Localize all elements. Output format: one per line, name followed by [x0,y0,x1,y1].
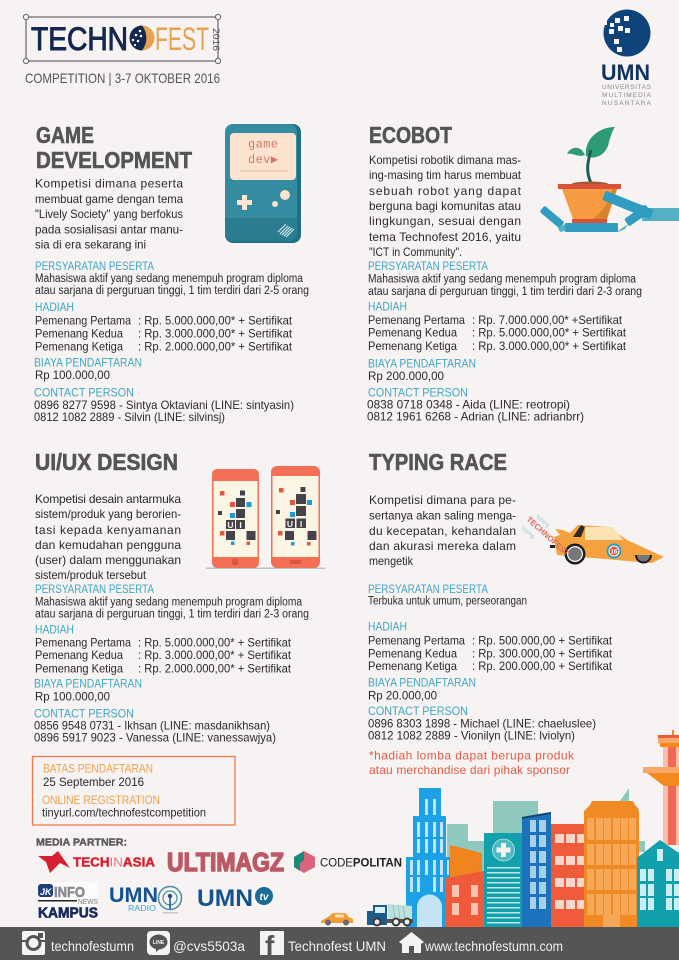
registration fee [34,678,142,704]
logo: UMN TV: UMN [197,885,253,912]
prizes: : Rp. 500.000,00 + Sertifikat [472,633,613,647]
background buildings [447,801,645,927]
orange slanted building [450,845,482,880]
icon: two smartphones: I [300,519,302,529]
description: "ICT in Community". [369,245,462,259]
description: tasi kepada kenyamanan [35,523,181,537]
contact person [368,705,596,742]
logo: UMN Radio [109,884,182,914]
prize footnote [369,748,575,777]
prizes: Pemenang Kedua [368,646,457,660]
description: dan kemudahan pengguna [35,538,181,552]
icon: two smartphones: U [287,519,293,529]
orange tall building [584,801,639,927]
prizes: : Rp. 2.000.000,00* + Sertifikat [138,340,293,354]
logo: UMN Radio: UMN [109,884,158,907]
contact person: CONTACT PERSON [34,707,134,720]
logo: Codepolitan [294,851,402,873]
logo: Technofest 2016: TECHN [31,21,128,57]
prizes: Pemenang Ketiga [35,661,123,675]
panel: ecobot [367,122,679,424]
website address: www.technofestumn.com [424,938,563,954]
description: "Lively Society" yang berfokus [35,207,183,221]
description [369,153,522,259]
contact person: 0856 9548 0731 - Ikhsan (LINE: masdanikhsan) [34,718,270,732]
logo: UMN: NUSANTARA [602,100,652,107]
facebook page: Technofest UMN [288,938,386,954]
callout: registration deadline: ONLINE REGISTRATION [42,794,160,807]
icon: website house [399,932,424,953]
prizes: Pemenang Ketiga [368,659,457,673]
callout: registration deadline: BATAS PENDAFTARAN [43,763,153,776]
prizes: : Rp. 5.000.000,00* + Sertifikat [138,636,292,650]
prizes: : Rp. 200.000,00 + Sertifikat [472,659,613,673]
description: Kompetisi desain antarmuka [35,492,181,506]
requirements [35,260,309,297]
icon: race car with letters: typing [520,525,536,540]
truck [367,904,413,926]
callout: registration deadline [32,756,235,825]
prizes: : Rp. 7.000.000,00* +Sertifikat [472,313,623,327]
logo: Info Kampus [38,882,98,922]
panel: media partners [36,836,402,922]
icon: race car with letters: typing [535,514,551,529]
icon: two smartphones: U [227,520,234,530]
requirements: atau sarjana di perguruan tinggi, 1 tim terdiri dari 2-5 orang [35,285,309,297]
prizes: Pemenang Pertama [368,313,465,327]
logo: UMN: UNIVERSITAS [602,84,652,91]
prizes: : Rp. 5.000.000,00* + Sertifikat [138,313,293,327]
contact person: 0896 5917 9023 - Vanessa (LINE: vanessawjya) [34,731,276,745]
icon: two smartphones [206,466,325,569]
contact person: 0896 8303 1898 - Michael (LINE: chaeluslee) [368,716,596,730]
logo: Info Kampus: INFO [54,884,85,901]
description: sertanya akan saling menga- [369,509,516,523]
prizes [368,301,627,353]
description: Kompetisi dimana para pe- [369,493,516,507]
icon: race car with letters [520,514,664,564]
requirements [35,583,309,620]
logo: Ultimagz: ULTIMAGZ [167,847,284,877]
prizes: : Rp. 300.000,00 + Sertifikat [472,646,613,660]
contact person: 0812 1082 2889 - Silvin (LINE: silvinsj) [34,410,225,424]
heading: ecobot: ECOBOT [369,122,452,148]
requirements [368,583,527,607]
logo: UMN: UMN [601,60,650,85]
requirements: atau sarjana di perguruan tinggi, 1 tim terdiri dari 2-3 orang [35,608,309,620]
logo: UMN TV: tv [260,892,270,903]
icon: game console [225,124,301,243]
tv tower [643,730,679,845]
instagram handle: technofestumn [51,938,134,954]
requirements: PERSYARATAN PESERTA [35,583,154,596]
panel: ui/ux design [34,449,325,745]
requirements: atau sarjana di perguruan tinggi, 1 tim terdiri dari 2-3 orang [368,286,642,298]
contact person [34,707,276,745]
description [369,493,516,568]
description: Kompetisi dimana peserta [35,176,183,190]
requirements: Mahasiswa aktif yang sedang menempuh program diploma [368,273,637,285]
logo: Tech in Asia [38,851,156,873]
requirements [368,260,642,298]
contact person [34,387,294,424]
icon: line: LINE [153,940,165,946]
small car [321,913,353,926]
logo: Codepolitan: CODEPOLITAN [320,856,402,870]
heading: game development [36,122,192,173]
registration fee [368,677,476,702]
prizes: Pemenang Kedua [368,326,457,340]
description: tema Technofest 2016, yaitu [369,230,521,244]
media partner heading: MEDIA PARTNER: [36,836,127,848]
line handle: @cvs5503a [173,938,245,954]
icon: race car with letters: 16 [611,550,618,556]
requirements: Mahasiswa aktif yang sedang menempuh program diploma [35,273,304,285]
contact person: CONTACT PERSON [34,387,134,400]
registration fee: BIAYA PENDAFTARAN [34,357,142,370]
contact person: CONTACT PERSON [368,705,468,718]
prizes [35,301,293,354]
triangle roof [620,788,629,801]
prizes: : Rp. 5.000.000,00* + Sertifikat [472,326,627,340]
requirements: PERSYARATAN PESERTA [368,583,488,596]
icon: race car with letters: TECHNOFEST [525,515,571,558]
description: ing-masing tim harus membuat [369,168,522,182]
callout: registration deadline: tinyurl.com/technofestcompetition [42,806,206,820]
logo: Info Kampus: KAMPUS [38,904,98,922]
logo: UMN [601,10,652,107]
prizes: HADIAH [368,621,407,634]
prizes: Pemenang Kedua [35,327,123,341]
prizes: : Rp. 3.000.000,00* + Sertifikat [138,327,293,341]
logo: Technofest 2016 [23,14,221,64]
description: pada sosialisasi antar manu- [35,222,183,236]
prizes: : Rp. 3.000.000,00* + Sertifikat [472,339,627,353]
registration fee: BIAYA PENDAFTARAN [368,677,476,690]
logo: Technofest 2016: FEST [155,21,209,57]
icon: plant held by robot arm [539,127,679,232]
prizes: : Rp. 2.000.000,00* + Sertifikat [138,661,292,675]
prize footnote: *hadiah lomba dapat berupa produk [369,748,575,762]
registration fee: BIAYA PENDAFTARAN [34,678,142,691]
footer bar [0,927,679,960]
teal house [637,840,679,927]
prizes: Pemenang Ketiga [35,340,123,354]
requirements: Terbuka untuk umum, perseorangan [368,595,527,607]
illustration: city skyline [321,730,679,927]
blue tower [406,788,450,927]
icon: game console: dev▶ [248,153,279,167]
description: sebuah robot yang dapat [369,184,522,198]
description: Kompetisi robotik dimana mas- [369,153,521,167]
contact person: 0838 0718 0348 - Aida (LINE: reotropi) [367,397,570,411]
prizes: Pemenang Kedua [35,648,123,662]
prizes: HADIAH [368,301,407,314]
logo: Tech in Asia: TECHINASIA [73,855,156,870]
prizes: HADIAH [35,301,74,314]
prizes: : Rp. 3.000.000,00* + Sertifikat [138,648,292,662]
contact person: CONTACT PERSON [368,387,468,400]
registration fee: Rp 20.000,00 [368,688,437,702]
callout: registration deadline: 25 September 2016 [43,775,144,789]
description: sistem/produk tersebut [35,568,147,582]
blue office building [522,812,551,927]
panel: typing race [368,449,664,777]
description: sia di era sekarang ini [35,238,146,252]
description: mengetik [369,554,414,568]
prizes [368,621,613,673]
logo: UMN: MULTIMEDIA [602,92,652,99]
heading: game development: DEVELOPMENT [36,147,192,173]
registration fee [368,358,476,383]
contact person: 0896 8277 9598 - Sintya Oktaviani (LINE: sintyasin) [34,398,294,412]
prizes: HADIAH [35,623,74,636]
logo: Technofest 2016: 2016 [211,28,221,51]
panel: game development [34,122,309,424]
prizes [35,623,292,675]
icon: two smartphones: I [239,520,242,530]
heading: typing race: TYPING RACE [369,449,507,475]
registration fee [34,357,142,382]
contact person [367,387,584,424]
requirements: PERSYARATAN PESERTA [368,260,488,273]
red low building [445,871,485,927]
prize footnote: atau merchandise dari pihak sponsor [369,763,570,777]
event date line: COMPETITION | 3-7 OKTOBER 2016 [25,70,220,86]
prizes: Pemenang Pertama [368,633,465,647]
registration fee: Rp 100.000,00 [35,690,110,704]
contact person: 0812 1082 2889 - Vionilyn (LINE: lviolyn) [368,728,575,742]
description: dan akurasi mereka dalam [369,539,516,553]
prizes: Pemenang Pertama [35,313,131,327]
heading: ui/ux design: UI/UX DESIGN [35,449,178,475]
heading: game development: GAME [36,122,94,148]
hospital building [484,833,522,927]
requirements: Mahasiswa aktif yang sedang menempuh program diploma [35,597,303,609]
icon: game console: game [248,138,278,152]
registration fee: BIAYA PENDAFTARAN [368,358,476,371]
description: lingkungan, sesuai dengan [369,214,521,228]
description: berguna bagi komunitas atau [369,199,521,213]
description [35,176,183,252]
description [35,492,181,582]
requirements: PERSYARATAN PESERTA [35,260,154,273]
icon: instagram [22,931,45,955]
registration fee: Rp 100.000,00 [35,368,110,382]
icon: facebook [260,930,284,960]
logo: Info Kampus: NEWS [78,899,98,906]
icon: line [147,931,170,955]
logo: Info Kampus: JK [40,887,53,897]
description: du kecepatan, kehandalan [369,524,516,538]
description: (user) dalam menggunakan [35,553,181,567]
logo: UMN Radio: RADIO [128,904,156,913]
prizes: Pemenang Pertama [35,636,131,650]
red office building [551,824,584,927]
description: sistem/produk yang berorien- [35,507,181,521]
contact person: 0812 1961 6268 - Adrian (LINE: adrianbrr) [367,410,584,424]
description: membuat game dengan tema [35,192,183,206]
registration fee: Rp 200.000,00 [368,369,444,383]
prizes: Pemenang Ketiga [368,339,457,353]
